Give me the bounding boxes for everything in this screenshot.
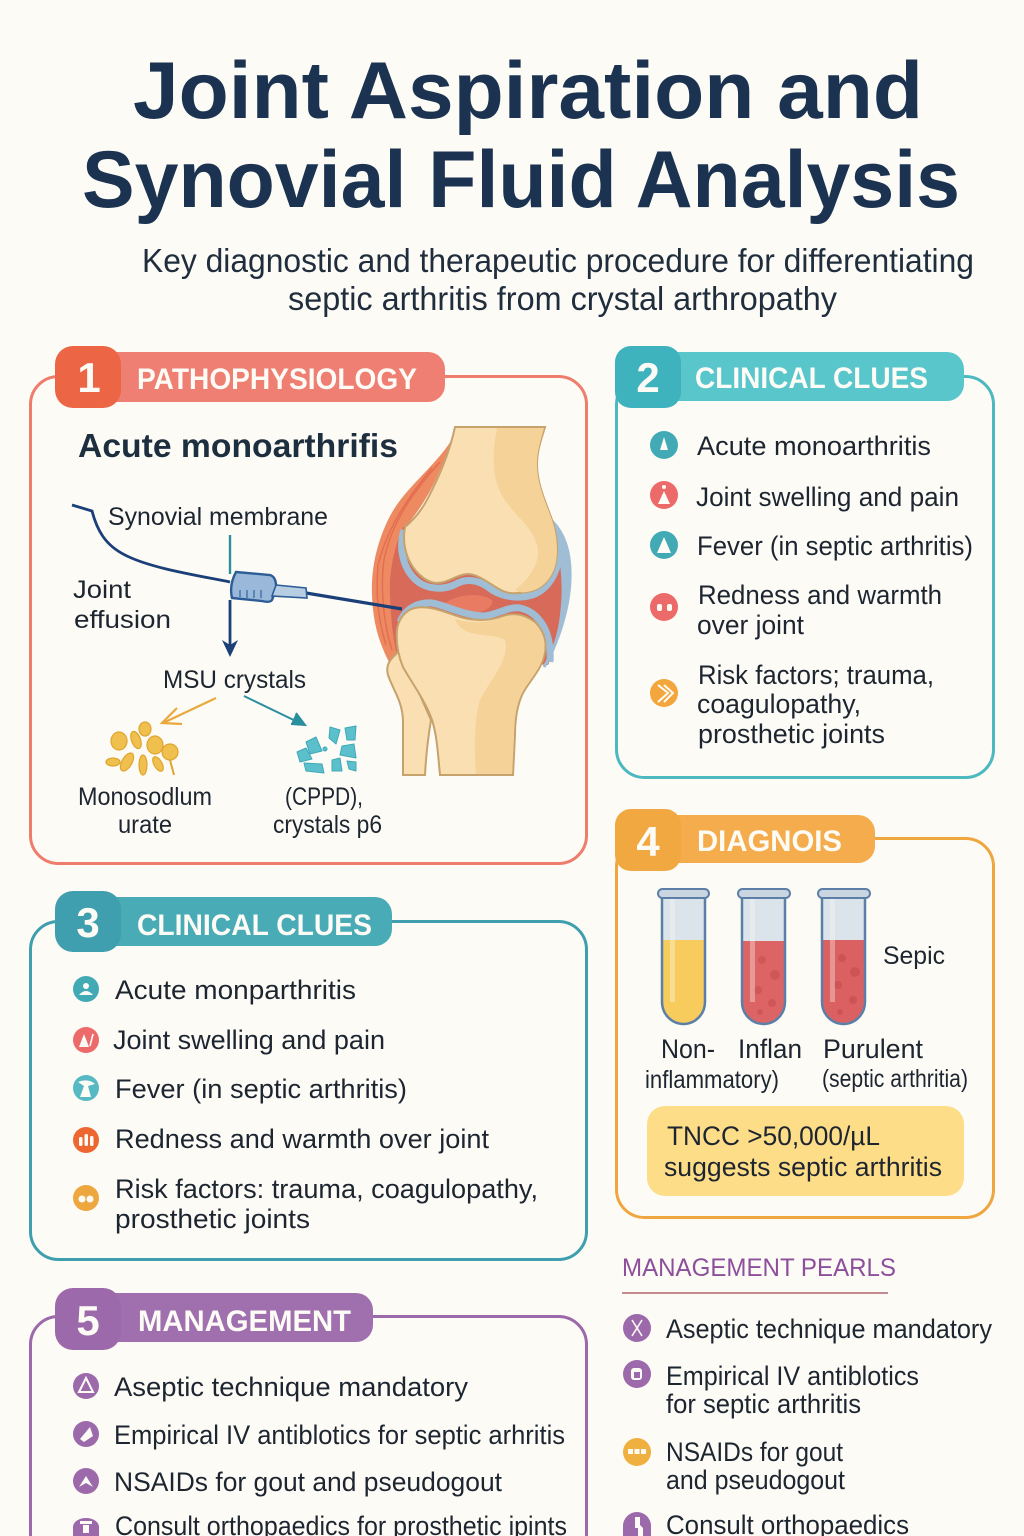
item: risk factors xyxy=(73,1174,538,1234)
header: clinical clues left xyxy=(55,891,392,952)
header: management: MANAGEMENT xyxy=(138,1305,351,1338)
subtitle: Key diagnostic and therapeutic procedure for differentiating xyxy=(142,242,974,279)
label: CPPD crystals xyxy=(273,783,382,839)
header: clinical clues right xyxy=(615,346,964,408)
header: clinical clues right: CLINICAL CLUES xyxy=(695,362,928,395)
label: monosodium urate xyxy=(78,783,212,839)
tube labels: Inflan xyxy=(738,1034,802,1064)
title: Synovial Fluid Analysis xyxy=(82,135,960,225)
icon: CPPD crystals xyxy=(297,726,356,773)
header: clinical clues left: 3 xyxy=(76,899,100,946)
header: diagnosis: DIAGNOIS xyxy=(697,825,842,858)
title: Joint Aspiration and xyxy=(133,46,923,136)
tube labels xyxy=(645,1034,968,1094)
item: joint swelling: Joint swelling and pain xyxy=(113,1025,385,1055)
syringe and needle xyxy=(72,505,402,609)
item: acute monoarthritis: Acute monoarthritis xyxy=(697,431,931,461)
label: CPPD crystals: (CPPD), xyxy=(285,783,363,811)
heading: management pearls: MANAGEMENT PEARLS xyxy=(622,1254,896,1282)
header: management xyxy=(55,1288,373,1350)
item: risk factors: Risk factors; trauma, xyxy=(698,660,934,690)
tube labels: Non- xyxy=(661,1034,715,1064)
header: pathophysiology xyxy=(55,346,445,408)
callout: TNCC threshold xyxy=(647,1106,964,1196)
panel: diagnosis xyxy=(615,809,994,1218)
callout: TNCC threshold: suggests septic arthritis xyxy=(664,1152,942,1182)
item: redness and warmth: over joint xyxy=(697,610,804,640)
arrow: downward flow xyxy=(222,535,238,657)
tube: purulent xyxy=(818,889,870,1024)
label: joint effusion: effusion xyxy=(74,606,171,634)
pearl: empirical antibiotics: for septic arthritis xyxy=(666,1389,861,1419)
label: MSU crystals: MSU crystals xyxy=(163,666,306,694)
arrow: to CPPD xyxy=(244,696,305,725)
panel: management pearls xyxy=(622,1254,992,1536)
item: fever: Fever (in septic arthritis) xyxy=(697,531,973,561)
item: NSAIDs: NSAIDs for gout and pseudogout xyxy=(114,1467,502,1497)
tube labels: inflammatory) xyxy=(645,1066,779,1094)
header: diagnosis xyxy=(615,809,875,871)
item: redness and warmth: Redness and warmth xyxy=(698,580,942,610)
header: clinical clues left: CLINICAL CLUES xyxy=(137,909,372,942)
tube labels: (septic arthritia) xyxy=(822,1065,968,1093)
label: joint effusion: Joint xyxy=(73,576,131,604)
tube: inflammatory xyxy=(738,889,790,1024)
label: CPPD crystals: crystals p6 xyxy=(273,811,382,839)
panel: clinical clues right xyxy=(615,346,994,778)
header: management: 5 xyxy=(76,1297,100,1344)
subtitle: septic arthritis from crystal arthropathy xyxy=(288,280,837,317)
label: joint effusion xyxy=(73,576,171,634)
label: monosodium urate: Monosodlum xyxy=(78,783,212,811)
header: pathophysiology: PATHOPHYSIOLOGY xyxy=(137,363,417,396)
item: acute monoarthritis: Acute monparthritis xyxy=(115,975,356,1005)
subtitle xyxy=(142,242,974,317)
panel: management xyxy=(30,1288,586,1536)
item: empirical antibiotics: Empirical IV antiblotics for septic arhritis xyxy=(114,1420,565,1450)
header: diagnosis: 4 xyxy=(636,818,660,865)
item: fever: Fever (in septic arthritis) xyxy=(115,1074,407,1104)
pearl: NSAIDs: NSAIDs for gout xyxy=(666,1437,843,1467)
panel: clinical clues left xyxy=(30,891,586,1260)
callout: TNCC threshold: TNCC >50,000/µL xyxy=(667,1121,880,1151)
tube labels: Purulent xyxy=(823,1034,923,1064)
label: sepic: Sepic xyxy=(883,942,945,970)
pearl: empirical antibiotics: Empirical IV antiblotics xyxy=(666,1361,919,1391)
heading: acute monoarthritis: Acute monoarthrifis xyxy=(78,427,398,464)
header: clinical clues right: 2 xyxy=(636,354,660,401)
knee joint illustration xyxy=(372,427,570,775)
item: redness and warmth: Redness and warmth over joint xyxy=(115,1124,489,1154)
title xyxy=(82,46,960,225)
panel: pathophysiology xyxy=(30,346,586,864)
header: pathophysiology: 1 xyxy=(77,354,101,401)
item: risk factors xyxy=(650,660,934,749)
arrow: to monosodium urate xyxy=(162,698,216,724)
item: redness and warmth xyxy=(650,580,942,640)
pearl: empirical antibiotics xyxy=(623,1360,919,1419)
item: risk factors: prosthetic joints xyxy=(698,719,885,749)
label: synovial membrane: Synovial membrane xyxy=(108,503,328,531)
item: risk factors: coagulopathy, xyxy=(697,689,861,719)
item: risk factors: Risk factors: trauma, coagulopathy, xyxy=(115,1174,538,1204)
item: aseptic technique: Aseptic technique mandatory xyxy=(114,1372,468,1402)
item: risk factors: prosthetic joints xyxy=(115,1204,310,1234)
pearl: NSAIDs xyxy=(623,1437,845,1495)
icon: urate crystals xyxy=(106,722,178,775)
pearl: aseptic technique: Aseptic technique mandatory xyxy=(666,1314,992,1344)
tube: non-inflammatory xyxy=(658,889,709,1024)
pearl: NSAIDs: and pseudogout xyxy=(666,1465,845,1495)
label: monosodium urate: urate xyxy=(118,811,172,839)
item: joint swelling: Joint swelling and pain xyxy=(696,482,959,512)
